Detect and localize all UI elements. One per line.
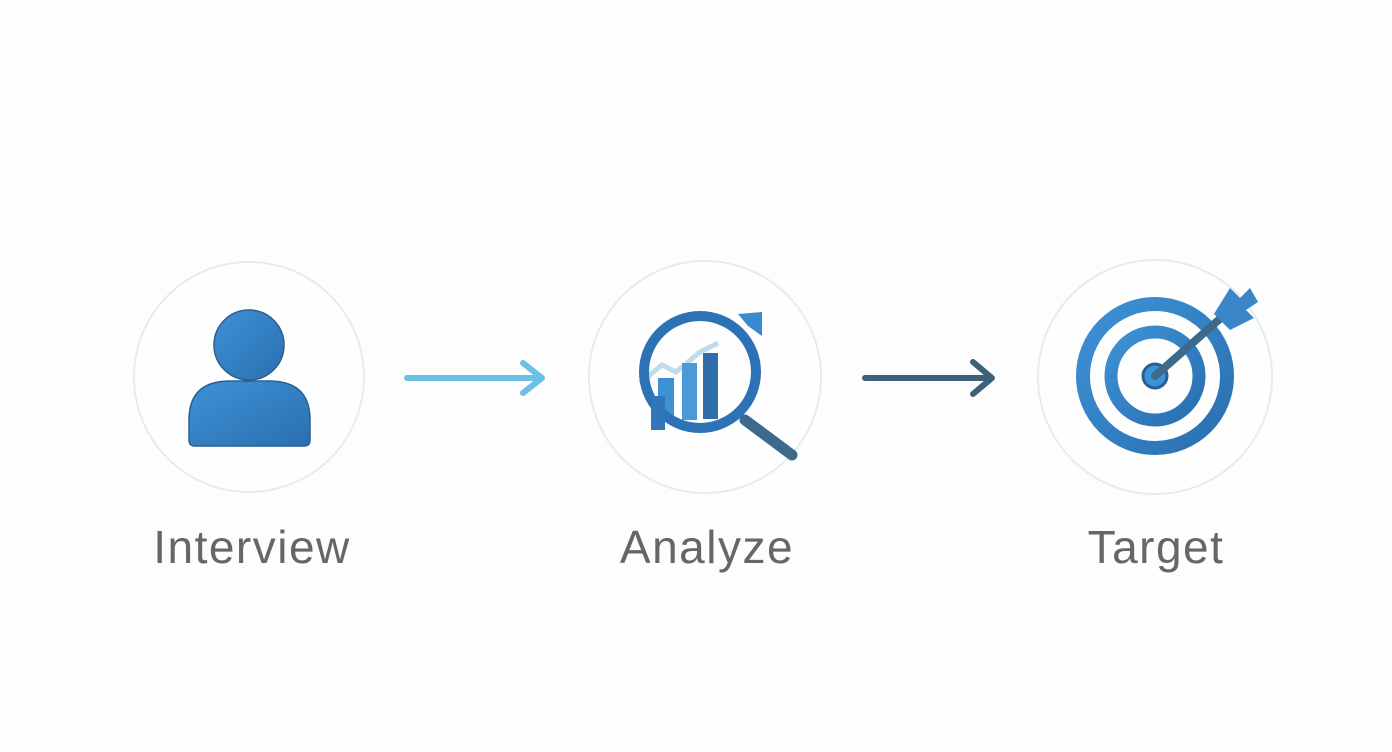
arrow 1 <box>407 363 542 393</box>
step: analyze <box>589 261 821 573</box>
icon: person <box>189 310 310 446</box>
label: Interview: Interview <box>153 521 351 573</box>
label: Analyze: Analyze <box>620 521 794 573</box>
arrow 2 <box>865 362 992 394</box>
step: target <box>1038 260 1272 573</box>
step: interview <box>134 262 364 573</box>
icon: magnifier chart <box>640 312 792 455</box>
circle: analyze <box>589 261 821 493</box>
label: Target: Target <box>1088 521 1224 573</box>
circle: interview <box>134 262 364 492</box>
circle: target <box>1038 260 1272 494</box>
icon: target <box>1083 288 1258 448</box>
